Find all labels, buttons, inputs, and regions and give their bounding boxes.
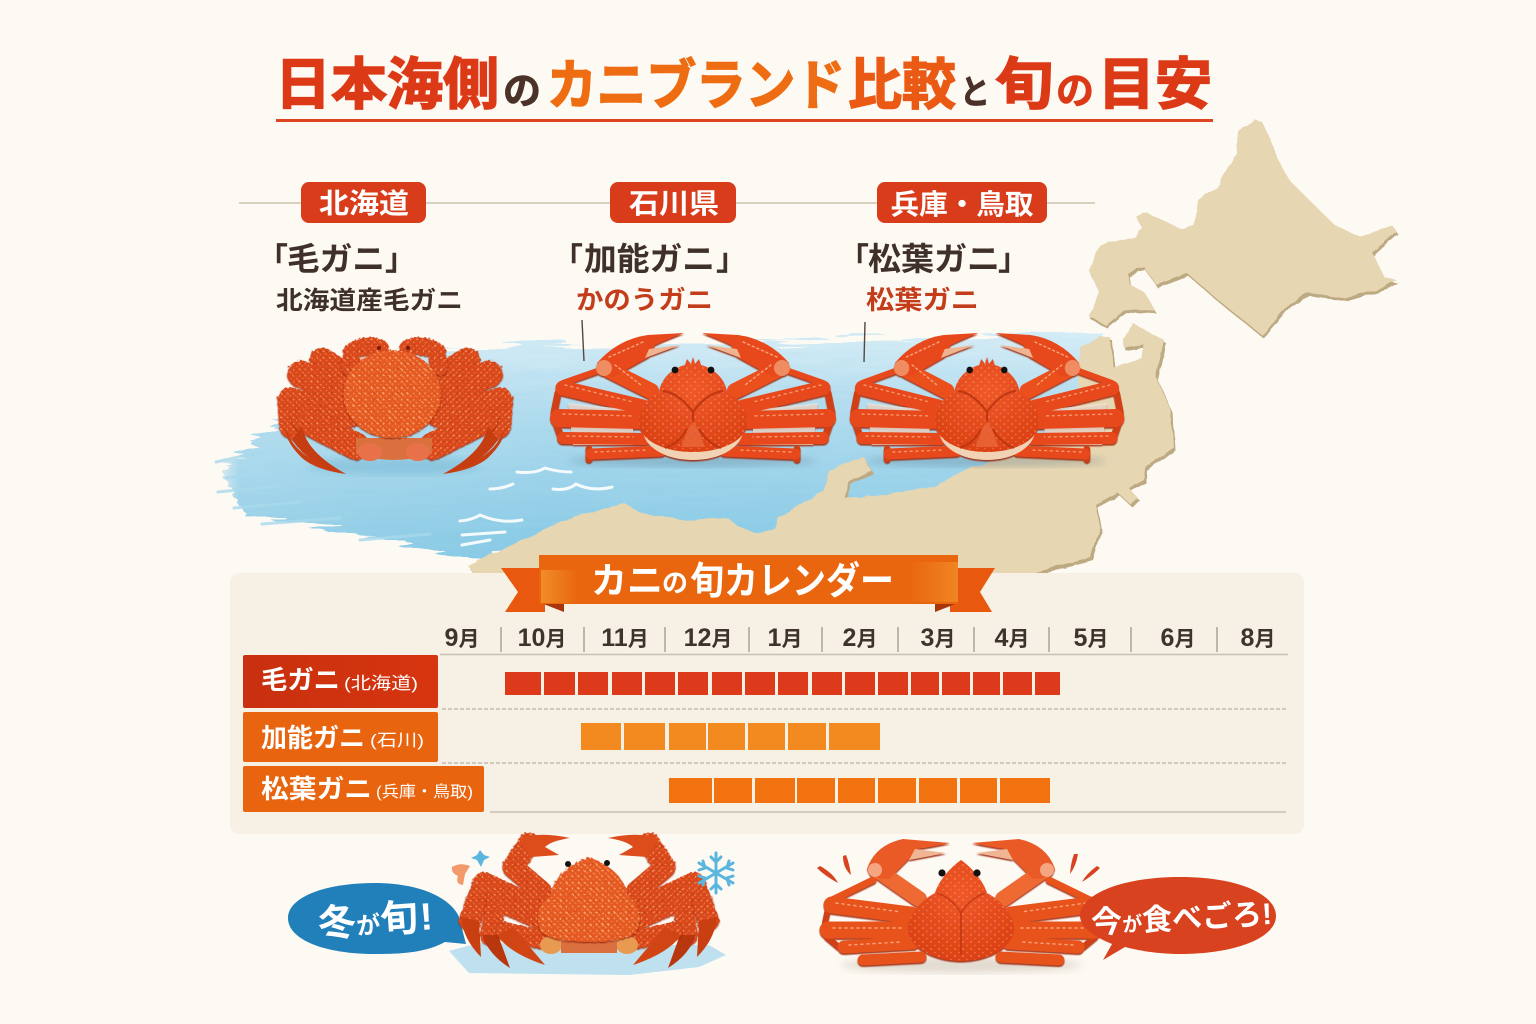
map: Honshu: [467, 323, 1175, 583]
brand name: Kano crab: [552, 241, 747, 315]
row label: Kegani: [243, 655, 438, 708]
title: 目安: [1098, 53, 1212, 116]
row label: Kano crab: (石川): [370, 731, 424, 750]
crab illustration: Matsuba crab: [854, 333, 1120, 467]
brand name: Kano crab: 加能ガニ: [584, 241, 715, 277]
season bar: Kegani: [505, 672, 1060, 695]
title: カニブランド: [547, 56, 845, 116]
brand name: Matsuba crab: 」: [998, 242, 1029, 277]
sea with brushed edges: [212, 332, 1105, 565]
row label: Kegani: (北海道): [344, 674, 418, 693]
brand name: Kano crab: 「: [552, 242, 583, 277]
calendar ribbon heading: [501, 555, 995, 612]
brand name: Kegani: 毛ガニ: [287, 241, 385, 277]
speech bubble: winter season: 冬が旬!: [317, 896, 434, 946]
speech bubble: eat now: 今が食べごろ!: [1090, 896, 1273, 940]
brand name: Kegani: [257, 241, 463, 315]
title: の: [1056, 71, 1094, 113]
title: 日本海側: [275, 53, 499, 116]
month header: 5月: [1074, 624, 1108, 652]
brand name: Matsuba crab: 松葉ガニ: [868, 241, 1000, 277]
row label: Kano crab: 加能ガニ: [261, 723, 365, 753]
map: Hokkaido: [1088, 119, 1398, 338]
brand name: Kegani: 「: [257, 242, 288, 277]
season bar: Kano crab: [581, 723, 880, 750]
title: 旬: [995, 53, 1053, 116]
month header: 11月: [601, 624, 649, 652]
leader line: Kano crab: [582, 320, 584, 361]
region divider line: [239, 202, 1095, 204]
brand name: Kegani: 北海道産毛ガニ: [276, 287, 463, 315]
month header: 10月: [518, 624, 566, 652]
month header: 12月: [684, 624, 732, 652]
icon: snowflake: [699, 853, 733, 893]
crab illustration: Kano crab: [554, 333, 832, 467]
map of Japan: [467, 119, 1398, 583]
brand name: Matsuba crab: 松葉ガニ: [866, 285, 979, 315]
region pill: Hyogo and Tottori: 兵庫・鳥取: [890, 189, 1034, 220]
title: と: [960, 74, 990, 112]
month header: 4月: [995, 624, 1029, 652]
region pill: Ishikawa: 石川県: [629, 188, 719, 219]
month header: 1月: [768, 624, 802, 652]
leader line: Matsuba crab: [864, 322, 865, 362]
accent marks: left: [817, 855, 851, 883]
crab illustration: snow crab at its best: [825, 839, 1097, 973]
icon: blue spark: [471, 850, 490, 867]
row label: Matsuba crab: (兵庫・鳥取): [376, 783, 473, 801]
brand name: Kano crab: かのうガニ: [576, 285, 713, 315]
brand name: Kegani: 」: [385, 242, 416, 277]
region pill: Hokkaido: [301, 182, 426, 223]
title: の: [503, 71, 541, 113]
brand name: Matsuba crab: 「: [838, 242, 869, 277]
region pill: Hyogo and Tottori: [877, 182, 1047, 223]
month header: 9月: [445, 624, 479, 652]
month header: 2月: [843, 624, 877, 652]
region pill: Ishikawa: [610, 182, 736, 223]
brand name: Matsuba crab: [838, 241, 1029, 315]
calendar panel: [230, 573, 1304, 834]
speech bubble: eat now: [1080, 877, 1276, 960]
icon: orange spark: [452, 864, 470, 885]
month header: 6月: [1161, 624, 1195, 652]
row label: Matsuba crab: 松葉ガニ: [261, 774, 372, 804]
season bar: Matsuba crab: [669, 778, 1050, 803]
crab illustration: hairy crab: [287, 346, 504, 475]
month header: [445, 624, 1275, 652]
month header: 3月: [921, 624, 955, 652]
speech bubble: winter season: [288, 883, 466, 954]
row label: Kegani: 毛ガニ: [261, 665, 340, 695]
month header: 8月: [1241, 624, 1275, 652]
region pill: Hokkaido: 北海道: [319, 188, 409, 219]
row label: Kano crab: [243, 712, 438, 762]
title: 比較: [848, 54, 956, 116]
waves: [460, 468, 612, 545]
brand name: Kano crab: 」: [716, 242, 747, 277]
crab illustration: winter hairy crab: [449, 835, 726, 975]
calendar ribbon heading: 旬カレンダー: [690, 561, 894, 603]
accent marks: right: [1070, 854, 1100, 882]
row label: Matsuba crab: [243, 766, 484, 812]
calendar ribbon heading: カニ: [591, 560, 663, 601]
calendar ribbon heading: の: [662, 568, 688, 598]
title: [275, 53, 1213, 122]
